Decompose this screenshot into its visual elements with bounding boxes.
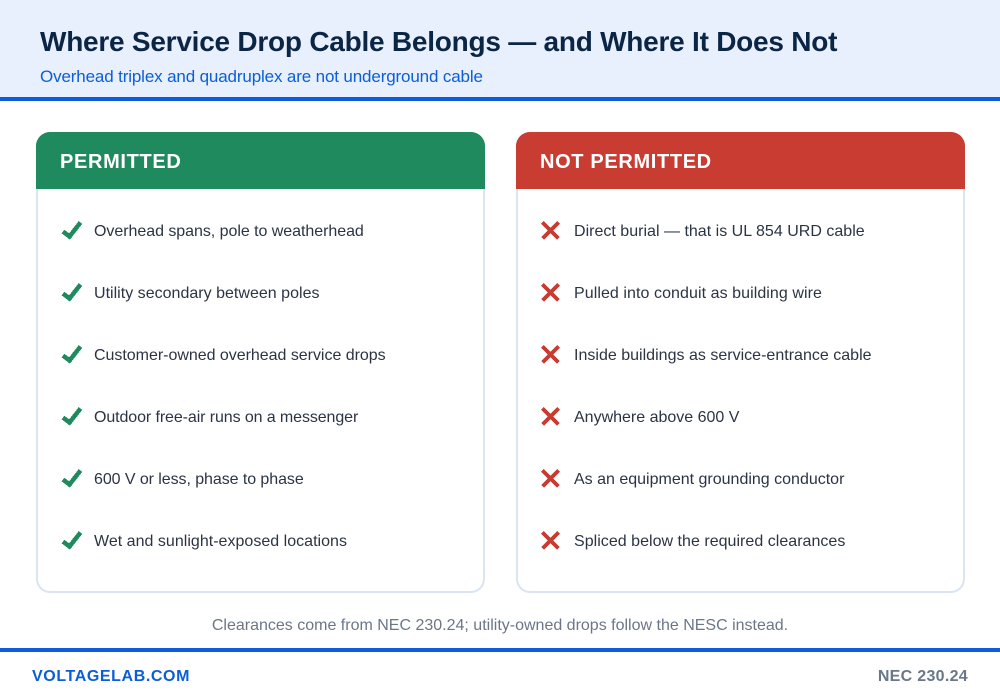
subtitle: Overhead triplex and quadruplex are not underground cable [40, 67, 483, 86]
title: Where Service Drop Cable Belongs — and Where It Does Not [40, 26, 837, 57]
item: customer-owned drops: Customer-owned overhead service drops [94, 347, 386, 364]
panel: not permitted [516, 132, 965, 593]
panel header: not permitted [516, 132, 965, 189]
panel header: permitted [36, 132, 485, 189]
item: conduit: Pulled into conduit as building wire [574, 285, 822, 302]
item: outdoor free-air runs: Outdoor free-air runs on a messenger [94, 409, 358, 426]
item: above 600 V: Anywhere above 600 V [574, 409, 739, 426]
panel: permitted [36, 132, 485, 593]
header band [0, 0, 1000, 101]
item: inside buildings: Inside buildings as service-entrance cable [574, 347, 872, 364]
item: direct burial: Direct burial — that is UL 854 URD cable [574, 223, 865, 240]
item: overhead spans: Overhead spans, pole to weatherhead [94, 223, 364, 240]
footer brand: VOLTAGELAB.COM [32, 668, 190, 685]
item: 600 V or less: 600 V or less, phase to phase [94, 471, 304, 488]
item: spliced: Spliced below the required clearances [574, 533, 845, 550]
footer [0, 648, 1000, 700]
panel header: not permitted: NOT PERMITTED [540, 151, 712, 173]
item: utility secondary: Utility secondary between poles [94, 285, 320, 302]
footnote: Clearances come from NEC 230.24; utility-owned drops follow the NESC instead. [212, 617, 788, 634]
footer reference: NEC 230.24 [878, 668, 968, 685]
panel header: permitted: PERMITTED [60, 151, 181, 173]
item: wet locations: Wet and sunlight-exposed locations [94, 533, 347, 550]
item: grounding conductor: As an equipment grounding conductor [574, 471, 844, 488]
